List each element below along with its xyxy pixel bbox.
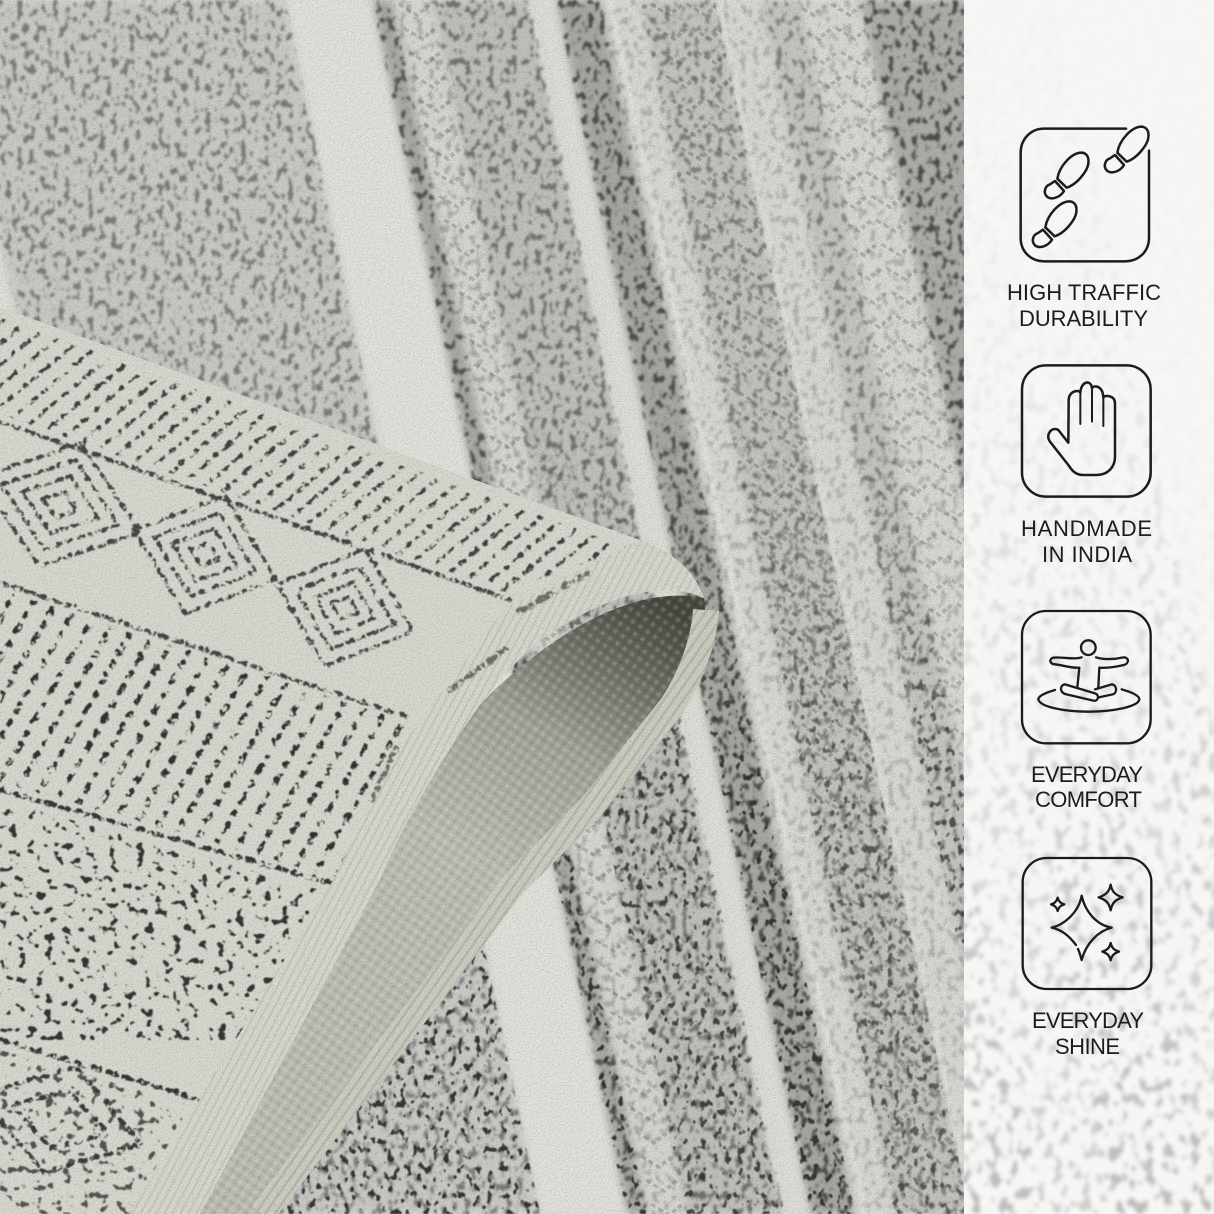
icon: footprints	[1021, 127, 1149, 261]
label: everyday shine: EVERYDAY	[1032, 1008, 1144, 1033]
feature: high traffic durability	[1007, 127, 1161, 331]
icon: meditating figure	[1022, 611, 1151, 743]
label: handmade in india: HANDMADE	[1021, 516, 1152, 541]
rug floor: striped woven pattern	[0, 0, 964, 1214]
fabric grain	[0, 0, 964, 1214]
feature: handmade in india	[1021, 365, 1152, 567]
label: handmade in india: IN INDIA	[1042, 542, 1132, 567]
label: everyday shine: SHINE	[1055, 1034, 1120, 1059]
feature: everyday comfort	[1022, 611, 1151, 812]
photo: rug close-up	[0, 0, 964, 1214]
folded flap with diamond pattern	[0, 307, 640, 1214]
icon: hand	[1022, 365, 1151, 497]
label: everyday comfort: COMFORT	[1035, 787, 1142, 812]
feature: everyday shine	[1023, 858, 1151, 1059]
label: high traffic durability: DURABILITY	[1019, 306, 1148, 331]
underside of the folded rug	[200, 596, 706, 1214]
flap binding edge	[130, 540, 704, 1214]
panel: feature sidebar	[964, 0, 1214, 1214]
icon: sparkles	[1023, 858, 1151, 989]
label: everyday comfort: EVERYDAY	[1031, 762, 1143, 787]
label: high traffic durability: HIGH TRAFFIC	[1007, 280, 1161, 305]
